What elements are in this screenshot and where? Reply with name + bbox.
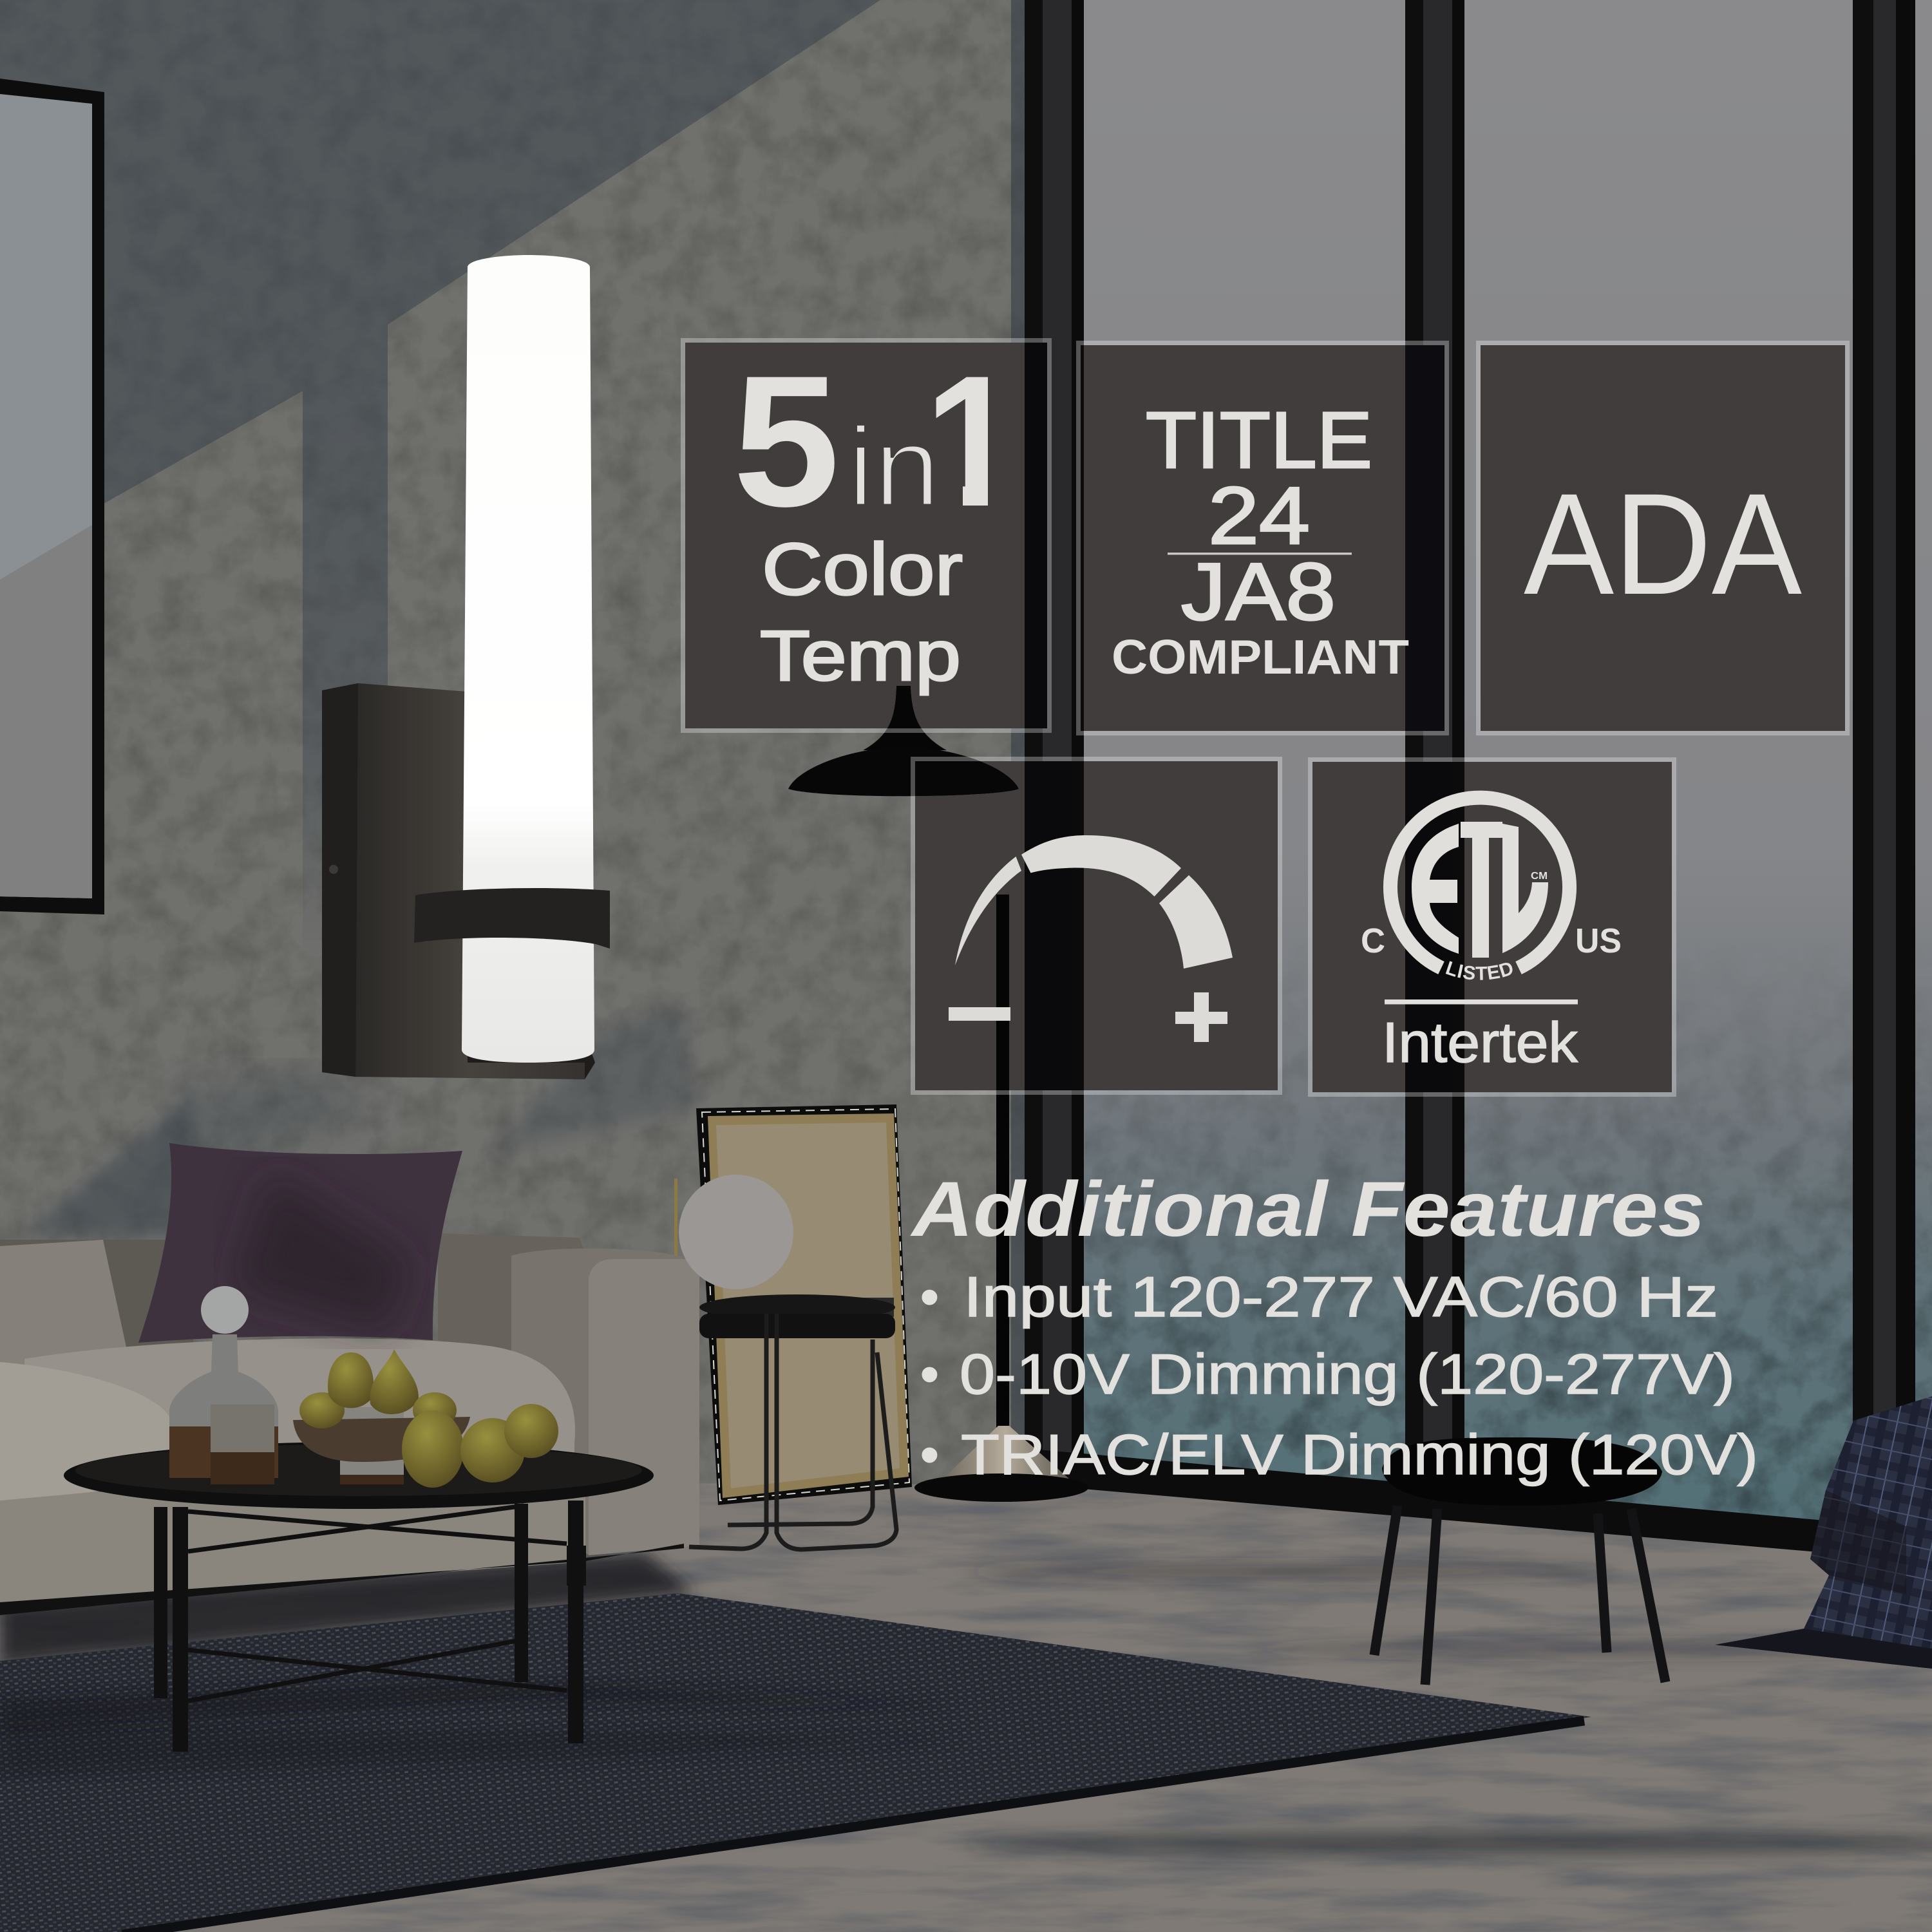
C and US labels: C — [1361, 922, 1385, 960]
sofa arm — [511, 1249, 699, 1555]
pillow — [138, 1143, 462, 1343]
compliant text: COMPLIANT — [1112, 630, 1409, 684]
decanter and glasses — [169, 1286, 404, 1484]
sconce backplate — [322, 683, 595, 1079]
picture frame on wall — [0, 79, 104, 914]
canvas leaning on wall — [696, 1104, 912, 1505]
icon: ETL mark — [1383, 791, 1577, 980]
feature list — [920, 1265, 1758, 1486]
icon: dimmer arc — [955, 835, 1233, 969]
left front cushion — [0, 1362, 169, 1501]
feature tile: 5 in 1 color temp — [683, 337, 1050, 730]
sofa — [0, 1143, 699, 1615]
heading: additional features: Additional Features — [910, 1165, 1705, 1253]
bullet: 0-10V dimming: • — [920, 1342, 940, 1406]
rug — [0, 1593, 1591, 1932]
feature tile: ADA — [1479, 343, 1847, 733]
big 5 in 1: in — [848, 404, 940, 530]
color temp label: Temp — [760, 616, 961, 696]
plaid blanket — [1715, 1396, 1932, 1669]
bullet: TRIAC/ELV dimming: TRIAC/ELV Dimming (120V) — [961, 1423, 1758, 1486]
seat cushion — [24, 1338, 575, 1488]
sconce ring bracket — [414, 888, 610, 949]
floor lamp — [788, 686, 1088, 1502]
bullet: 0-10V dimming: 0-10V Dimming (120-277V) — [960, 1342, 1735, 1406]
coffee table — [64, 1442, 654, 1752]
bullet: TRIAC/ELV dimming: • — [920, 1423, 940, 1486]
sofa base — [0, 1481, 585, 1604]
feature tile: title 24 JA8 compliant: 24 — [1208, 470, 1310, 561]
big 5 in 1: 1 — [924, 337, 1022, 545]
concrete wall — [0, 0, 1025, 1501]
feature tile: title 24 JA8 compliant — [1078, 343, 1446, 733]
icon: ETL mark: LISTED — [1445, 961, 1512, 980]
icon: minus — [949, 1007, 1010, 1021]
icon: plus — [1175, 992, 1227, 1042]
floor — [0, 1481, 1932, 1932]
stool — [1374, 1437, 1665, 1685]
window frames — [1025, 0, 1932, 1568]
side table with books and globe lamp — [674, 1175, 896, 1549]
fruit bowl — [293, 1349, 558, 1488]
product: wall sconce — [322, 255, 610, 1079]
sconce glass tube — [462, 255, 594, 1063]
window panes with misty forest view — [1030, 0, 1932, 1578]
Intertek label: Intertek — [1382, 1010, 1578, 1074]
icon: ETL mark: CM — [1531, 871, 1548, 882]
title 24 text: TITLE — [1146, 396, 1372, 485]
color temp label: Color — [762, 529, 963, 611]
big 5 in 1 — [739, 377, 988, 507]
big 5 in 1: 5 — [733, 337, 840, 545]
feature tile: ETL listed — [1308, 757, 1676, 1097]
feature tile: dimmable dial — [913, 759, 1280, 1092]
feature tile: ADA: ADA — [1524, 464, 1802, 625]
bullet: input voltage: Input 120-277 VAC/60 Hz — [963, 1265, 1718, 1329]
bullet: input voltage: • — [920, 1265, 940, 1329]
feature tile: ETL listed: US — [1575, 922, 1622, 960]
color temp label — [760, 529, 963, 696]
JA8 text: JA8 — [1181, 546, 1336, 637]
